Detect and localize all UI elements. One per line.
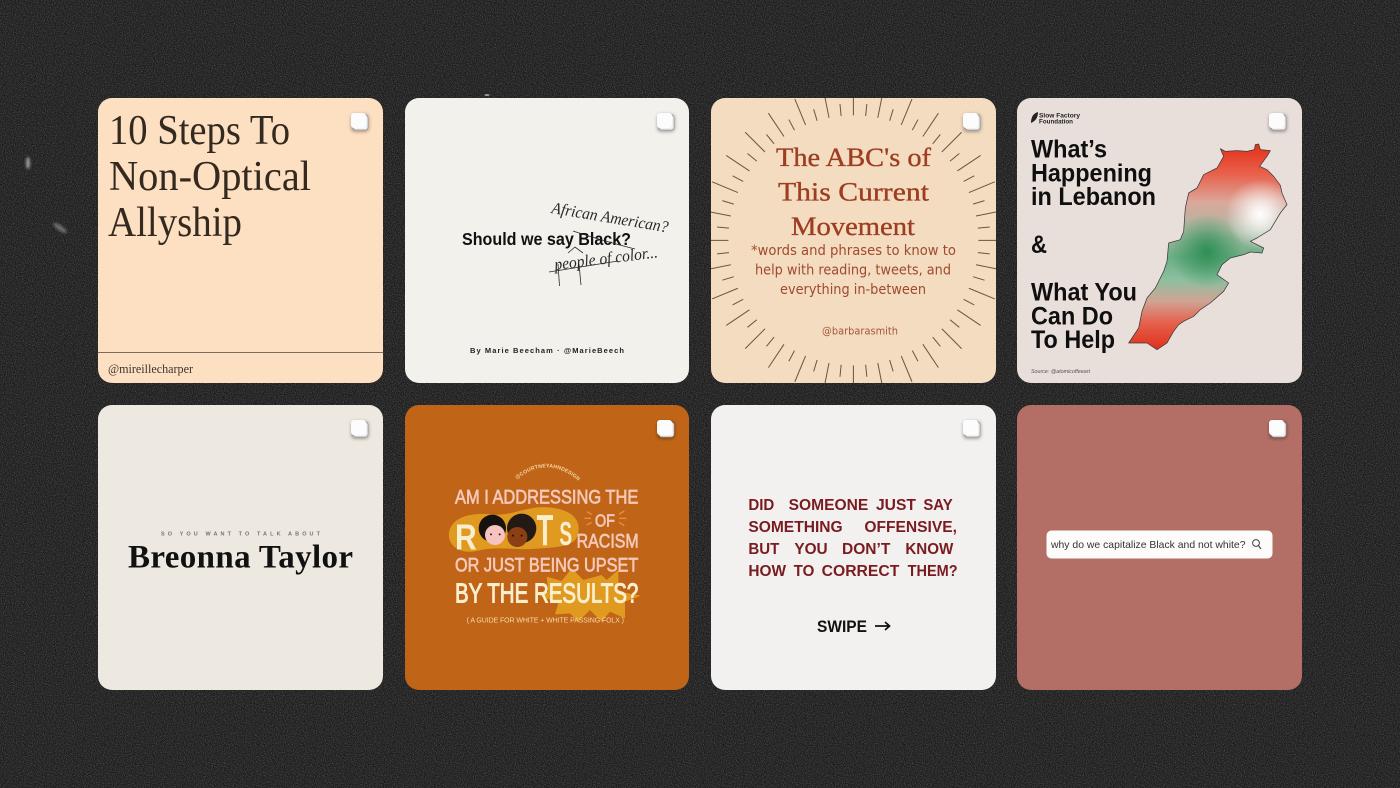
yellow burst behind RESULTS <box>538 568 641 622</box>
headline: Happening <box>1031 160 1152 188</box>
lettering group <box>448 464 641 625</box>
icon: carousel <box>657 420 675 439</box>
author handle: @mireillecharper <box>108 361 194 376</box>
logo: Slow Factory Foundation: Slow Factory <box>1039 112 1081 120</box>
subtitle: help with reading, tweets, and <box>755 262 951 278</box>
subtitle: everything in-between <box>780 282 926 298</box>
heading: justified question text: KNOW <box>905 541 954 558</box>
headline: & <box>1031 231 1047 259</box>
logo: Slow Factory Foundation <box>1031 112 1081 126</box>
icon: carousel <box>1269 420 1287 439</box>
line: BY THE RESULTS?: BY THE RESULTS? <box>455 578 638 609</box>
heading: Breonna Taylor: Breonna Taylor <box>128 540 353 576</box>
heading: justified question text: OFFENSIVE, <box>864 519 957 536</box>
icon: carousel <box>657 113 675 132</box>
headline: Can Do <box>1031 302 1113 330</box>
word: RACISM: RACISM <box>577 532 639 553</box>
word: OF with sparks: OF <box>595 510 615 530</box>
headline: in Lebanon <box>1031 183 1156 211</box>
panel: The ABC's of This Current Movement <box>711 98 996 383</box>
word: ROOTS letters: T <box>537 507 553 555</box>
handwriting: African American?: African American? <box>549 198 671 237</box>
heading: justified question text: TO <box>794 563 814 580</box>
heading: justified question text: YOU <box>794 541 828 558</box>
heading: justified question text: JUST <box>876 497 916 514</box>
heading: justified question text: THEM? <box>908 563 958 580</box>
line: AM I ADDRESSING THE: AM I ADDRESSING THE <box>455 488 638 509</box>
title: 10 Steps To Non-Optical Allyship: 10 Steps To <box>109 108 290 154</box>
logo: Slow Factory Foundation: Foundation <box>1039 118 1073 126</box>
icon: carousel <box>963 420 981 439</box>
byline: By Marie Beecham · @MarieBeech <box>470 346 624 355</box>
icon: carousel <box>351 420 369 439</box>
guide note: ( A GUIDE FOR WHITE + WHITE PASSING FOLX ) <box>467 618 624 625</box>
icon: carousel <box>963 113 981 132</box>
map: Lebanon <box>1124 141 1290 355</box>
search bar: why do we capitalize Black and not white? <box>1050 539 1246 551</box>
panel: Am I addressing the roots of racism <box>405 405 689 690</box>
panel: What's Happening in Lebanon <box>1017 98 1302 383</box>
headline: What You <box>1031 278 1137 306</box>
title: The ABC's of This Current Movement <box>776 142 931 241</box>
panel: why do we capitalize Black <box>1017 405 1302 690</box>
subtitle: *words and phrases to know to <box>751 243 956 259</box>
panel: Should we say Black? <box>405 98 689 383</box>
title: 10 Steps To Non-Optical Allyship: Allyship <box>108 200 242 246</box>
word: ROOTS letters: R <box>455 516 477 557</box>
heading: justified question text: CORRECT <box>822 563 900 580</box>
faces: two illustrated heads <box>479 514 536 547</box>
word: ROOTS letters <box>455 507 572 557</box>
headline: What’s <box>1031 136 1107 164</box>
sunburst rays <box>711 98 996 383</box>
handwritten strokes <box>549 231 635 286</box>
arrow: swipe <box>875 622 890 630</box>
heading: justified question text <box>748 497 958 580</box>
heading: justified question text: BUT <box>748 541 780 558</box>
heading: justified question text: DID <box>748 497 774 514</box>
title: The ABC's of This Current Movement: The ABC's of <box>776 142 931 172</box>
heading: Should we say Black?: Should we say Black? <box>462 229 631 249</box>
panel: Did someone just say something offensive <box>711 405 996 690</box>
source note: Source: @atomicoffeeart <box>1031 369 1090 375</box>
heading: justified question text: SOMETHING <box>748 519 843 536</box>
headline <box>1031 136 1156 354</box>
handwriting: people of color: people of color... <box>552 242 659 274</box>
heading: justified question text: SAY <box>923 497 953 514</box>
title: The ABC's of This Current Movement: This Current <box>778 176 930 206</box>
icon: carousel <box>1269 113 1287 132</box>
icon: carousel <box>351 113 369 132</box>
search bar <box>1046 530 1272 558</box>
eyebrow text: SO YOU WANT TO TALK ABOUT <box>161 532 321 538</box>
word: OF with sparks <box>584 510 626 530</box>
panel: 10 Steps To Non-Optical Allyship <box>98 98 383 383</box>
panel: Breonna Taylor <box>98 405 383 690</box>
label: SWIPE: SWIPE <box>817 618 867 636</box>
heading: justified question text: DON’T <box>842 541 891 558</box>
handle on arc: @COURTNEYAHNDESIGN <box>516 464 580 480</box>
title: 10 Steps To Non-Optical Allyship <box>108 108 311 246</box>
line: OR JUST BEING UPSET: OR JUST BEING UPSET <box>455 555 638 576</box>
headline: To Help <box>1031 326 1115 354</box>
yellow blob behind ROOTS <box>449 507 579 552</box>
title: 10 Steps To Non-Optical Allyship: Non-Optical <box>109 154 311 200</box>
author handle: @barbarasmith <box>822 324 898 338</box>
heading: justified question text: HOW <box>748 563 787 580</box>
title: The ABC's of This Current Movement: Movement <box>791 211 916 241</box>
subtitle <box>751 243 956 298</box>
word: ROOTS letters: S <box>559 516 572 553</box>
heading: justified question text: SOMEONE <box>789 497 869 514</box>
